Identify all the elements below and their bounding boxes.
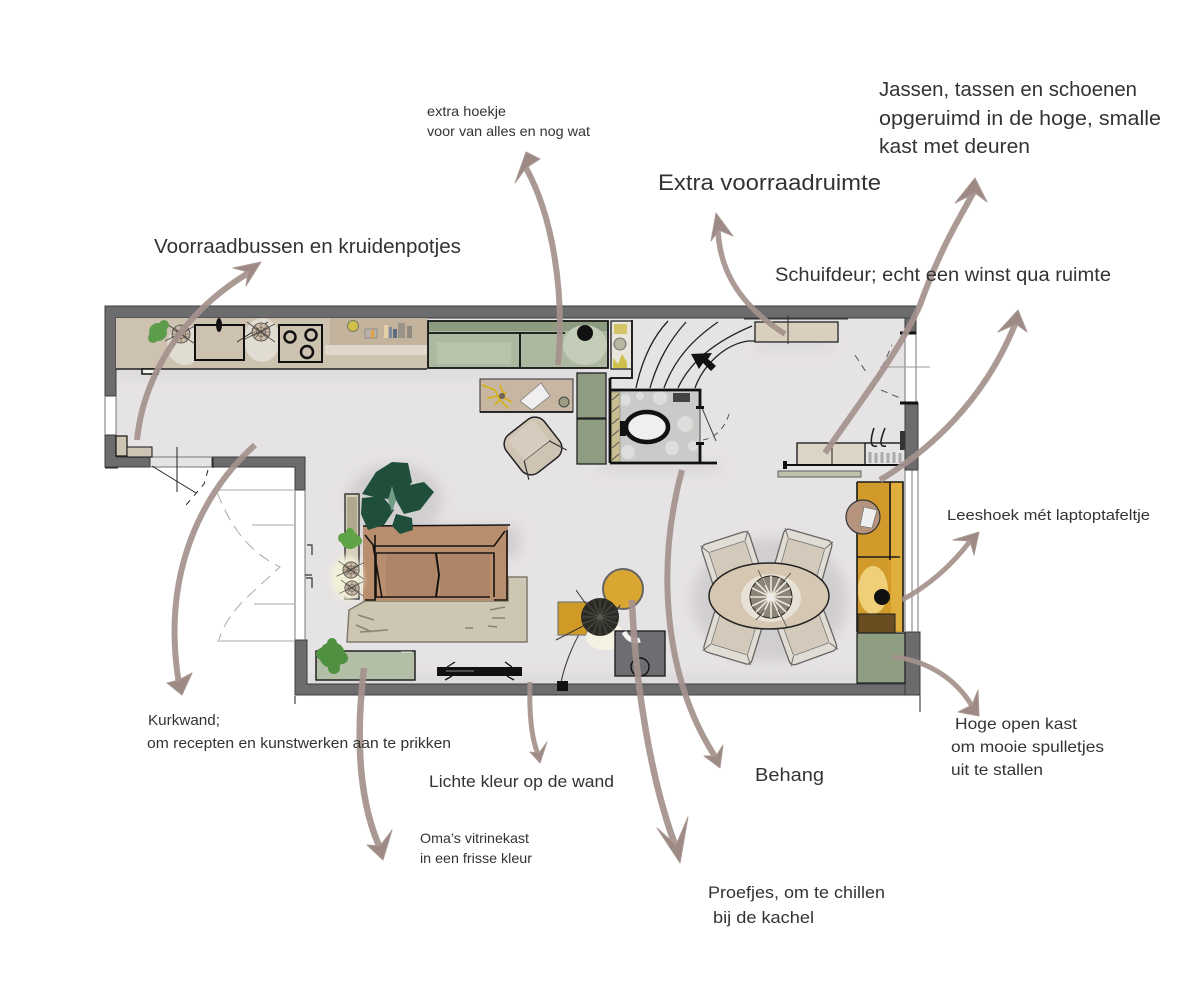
- vitrine sofa green: [428, 321, 608, 368]
- label: extra voorraadruimte: Extra voorraadruimte: [658, 170, 881, 195]
- south-west wall: [295, 640, 920, 695]
- toilet room: [610, 378, 729, 463]
- label: schuifdeur: Schuifdeur; echt een winst qua ruimte: [775, 265, 1111, 286]
- yellow window bench: [857, 482, 903, 633]
- label: leeshoek: Leeshoek mét laptoptafeltje: [947, 507, 1150, 524]
- arrow: extra voorraadruimte: [711, 213, 785, 334]
- left lower wall: [105, 435, 150, 467]
- sliding door swing: [855, 345, 900, 398]
- label: jassen: opgeruimd in de hoge, smalle: [879, 108, 1161, 130]
- arrow: proefjes: [632, 600, 688, 863]
- rug: [347, 577, 527, 642]
- label: hoge open kast: uit te stallen: [951, 762, 1043, 779]
- side table wickers: [337, 561, 364, 596]
- label: jassen: Jassen, tassen en schoenen: [879, 79, 1137, 101]
- dining table: [709, 563, 829, 629]
- label: extra hoekje: voor van alles en nog wat: [427, 123, 590, 139]
- label: lichte kleur: Lichte kleur op de wand: [429, 772, 614, 791]
- arrow: behang: [667, 470, 723, 768]
- coffee table: [480, 379, 573, 412]
- arrow: jassen: [825, 178, 987, 453]
- sofa: [363, 525, 510, 601]
- label: proefjes: Proefjes, om te chillen: [708, 883, 885, 902]
- narrow shelf: [331, 494, 363, 600]
- label: kurkwand: om recepten en kunstwerken aan te prikken: [147, 735, 451, 752]
- label: jassen: kast met deuren: [879, 136, 1030, 158]
- east walls: [905, 318, 916, 334]
- yellow jar: [348, 320, 358, 332]
- walls: [105, 306, 920, 695]
- label: oma's vitrinekast: Oma’s vitrinekast: [420, 830, 529, 846]
- kitchen plant: [148, 320, 169, 343]
- top storage cabinet: [744, 315, 848, 344]
- round side table: [846, 500, 880, 534]
- coat cabinet: [778, 428, 905, 477]
- label: kurkwand: Kurkwand;: [148, 712, 220, 729]
- shelf plant: [338, 528, 362, 549]
- hob: [279, 325, 322, 362]
- sink: [195, 325, 244, 360]
- floor lamp glow: [586, 624, 626, 650]
- label: hoge open kast: Hoge open kast: [955, 716, 1078, 733]
- kitchen south wall: [212, 457, 305, 490]
- label: extra hoekje: extra hoekje: [427, 103, 506, 119]
- arrow: leeshoek: [902, 532, 979, 600]
- label: proefjes: bij de kachel: [713, 908, 814, 927]
- label: voorraadbussen: Voorraadbussen en kruidenpotjes: [154, 236, 461, 258]
- dining chairs: [700, 528, 838, 666]
- floor lamp: [556, 590, 620, 640]
- corner plant: [316, 638, 348, 674]
- arrow: extra hoekje: [515, 152, 560, 365]
- green bench: [577, 373, 606, 464]
- wicker trivets: [165, 324, 195, 344]
- arrow: oma's vitrinekast: [360, 668, 392, 860]
- coat hooks: [865, 428, 902, 446]
- arrow: lichte kleur: [530, 682, 547, 763]
- yellow pouf: [603, 569, 643, 609]
- corner pantry: [116, 436, 152, 457]
- arrow: hoge open kast: [892, 657, 979, 716]
- label: hoge open kast: om mooie spulletjes: [951, 739, 1104, 756]
- kitchen counter: [116, 318, 427, 374]
- soft floor shadows: [116, 343, 905, 684]
- monstera plant: [361, 462, 434, 534]
- yellow stool: [558, 602, 587, 635]
- small shelf column: [610, 320, 632, 378]
- staircase: [636, 321, 755, 388]
- arrow: schuifdeur: [880, 310, 1027, 480]
- label: oma's vitrinekast: in een frisse kleur: [420, 850, 532, 866]
- tv / fireplace bar: [437, 662, 522, 680]
- label: behang: Behang: [755, 765, 824, 785]
- floor: [116, 318, 905, 684]
- cabinet oma: [316, 651, 415, 680]
- books: [365, 323, 412, 338]
- arrow: kurkwand: [167, 445, 255, 695]
- window and door lines: [105, 334, 930, 641]
- armchair: [499, 412, 567, 480]
- high open cabinet: [857, 633, 905, 683]
- wood stove: [615, 631, 665, 676]
- stair arrow: [691, 353, 716, 371]
- wall socket lamp cord: [557, 628, 583, 691]
- top wall: [105, 306, 916, 396]
- floor plan: [105, 306, 930, 712]
- arrow: voorraadbussen: [137, 262, 261, 440]
